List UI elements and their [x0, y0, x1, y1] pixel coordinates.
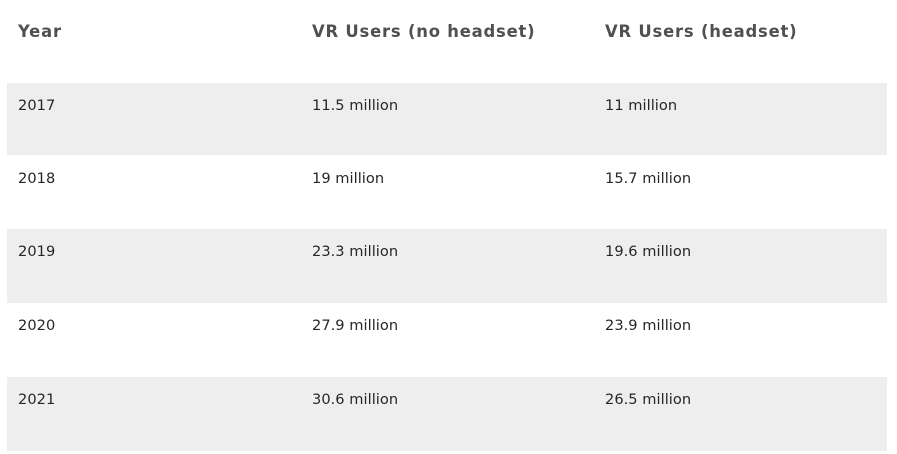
- row 2019: 2019: [18, 243, 55, 260]
- row 2021: [18, 391, 691, 408]
- header row: [18, 22, 797, 41]
- row 2019: [18, 243, 691, 260]
- row 2019: 19.6 million: [605, 243, 691, 260]
- row 2017: 11 million: [605, 97, 677, 114]
- row 2020: 2020: [18, 317, 55, 334]
- row 2017: 2017: [18, 97, 55, 114]
- row background: 2021: [7, 377, 887, 451]
- row 2020: [18, 317, 691, 334]
- row 2020: 23.9 million: [605, 317, 691, 334]
- row background: 2017: [7, 83, 887, 155]
- row 2018: [18, 170, 691, 187]
- row 2017: [18, 97, 677, 114]
- header: VR Users (headset): VR Users (headset): [605, 22, 797, 41]
- row 2021: 2021: [18, 391, 55, 408]
- row 2021: 30.6 million: [312, 391, 398, 408]
- row 2018: 19 million: [312, 170, 384, 187]
- row 2018: 15.7 million: [605, 170, 691, 187]
- row background: 2019: [7, 229, 887, 303]
- header: Year: Year: [18, 22, 62, 41]
- row 2019: 23.3 million: [312, 243, 398, 260]
- row 2017: 11.5 million: [312, 97, 398, 114]
- row 2020: 27.9 million: [312, 317, 398, 334]
- row 2021: 26.5 million: [605, 391, 691, 408]
- row 2018: 2018: [18, 170, 55, 187]
- header: VR Users (no headset): VR Users (no headset): [312, 22, 535, 41]
